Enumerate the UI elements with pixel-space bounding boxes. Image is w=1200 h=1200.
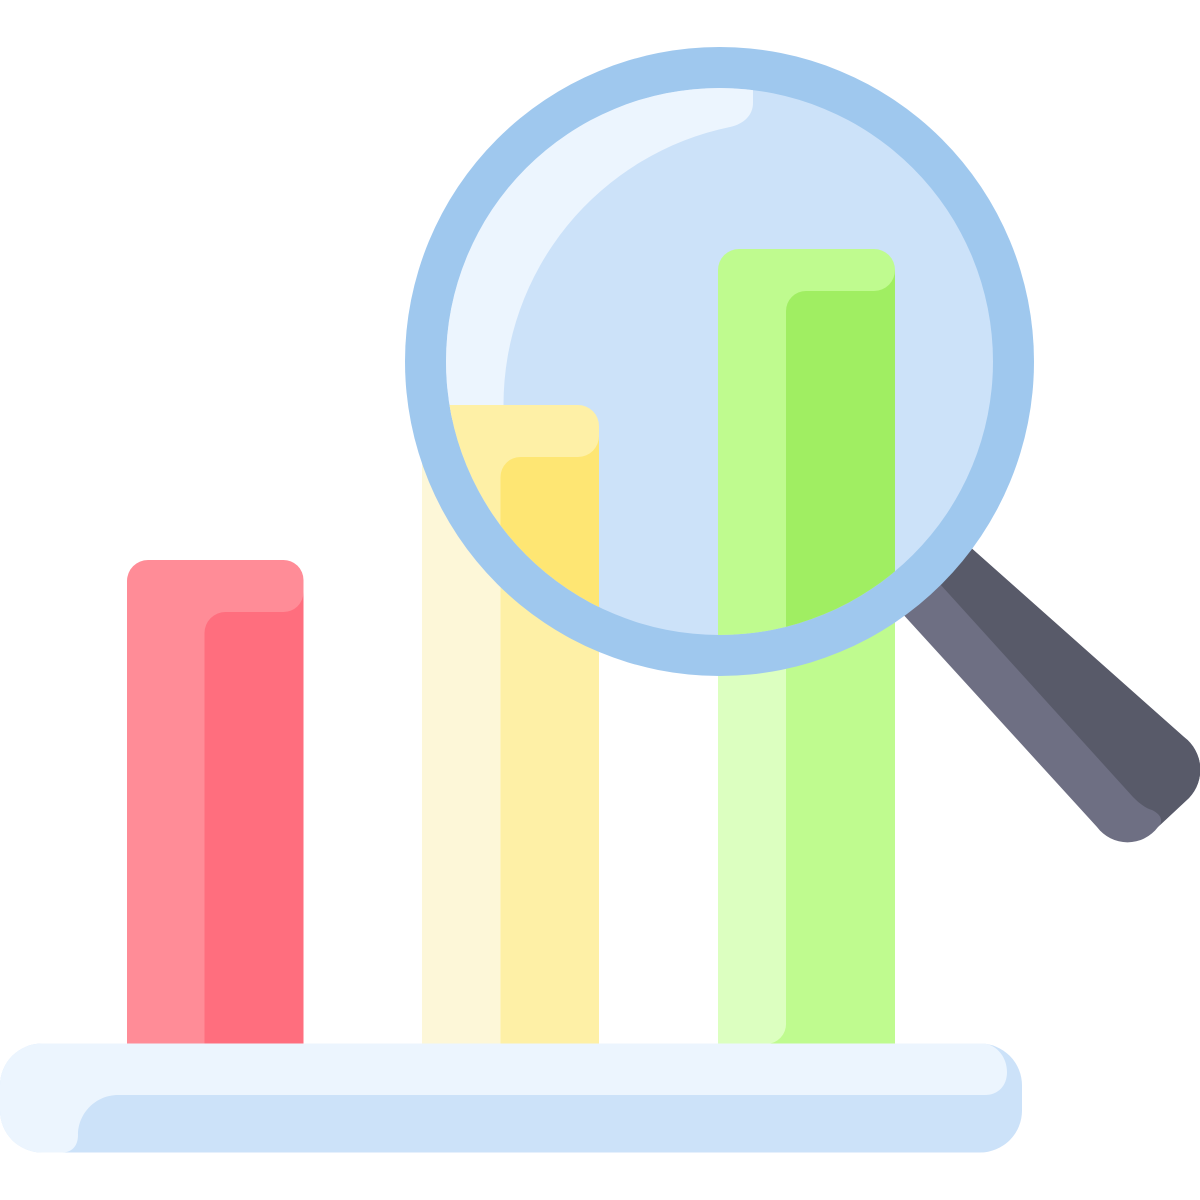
lens highlight [430,80,753,420]
base platform [0,1044,1022,1152]
magnified bars [450,249,895,635]
bar: yellow [422,420,599,1044]
handle [890,538,1200,842]
lens rim [405,47,1034,676]
lens glass [446,88,993,635]
bar: red [127,560,304,1044]
magnified bar: green [718,249,895,635]
bar: green [718,400,895,1044]
magnifying glass [405,47,1200,842]
magnified bar: yellow [450,405,599,607]
